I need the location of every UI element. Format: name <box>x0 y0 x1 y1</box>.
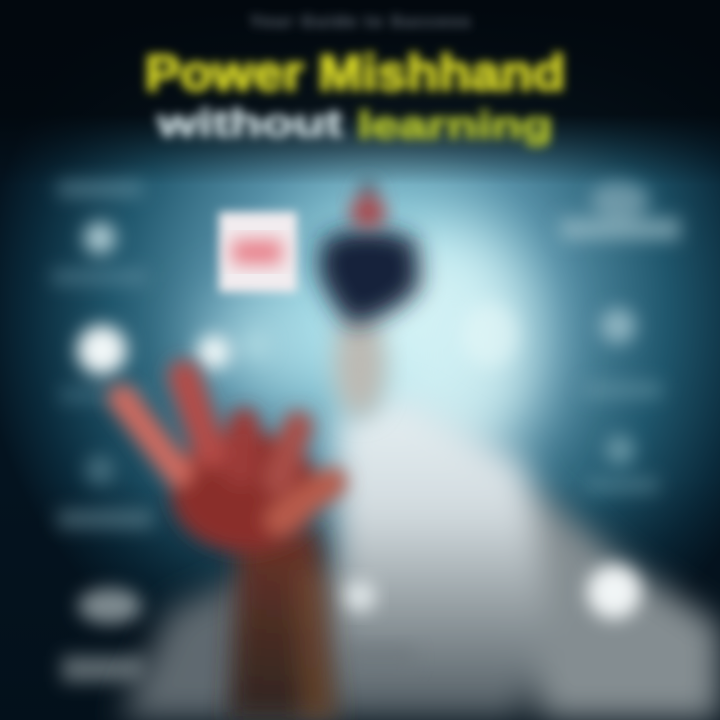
light glow around person <box>200 230 540 470</box>
small circle centre <box>344 580 376 612</box>
finger two <box>184 376 210 452</box>
right item three <box>586 435 658 492</box>
left item one <box>52 182 147 284</box>
title second line <box>156 103 553 147</box>
right item one <box>560 182 680 240</box>
neck <box>334 313 386 417</box>
white card with red mark <box>219 212 297 292</box>
title second line: without <box>156 103 343 145</box>
left column icons and labels <box>52 182 153 682</box>
finger three <box>240 424 244 470</box>
title tagline: Your Guide to Success <box>250 12 470 31</box>
finger four <box>278 426 298 480</box>
person <box>120 181 720 720</box>
hand <box>122 376 332 552</box>
right item four <box>565 650 655 672</box>
palm <box>171 432 319 552</box>
forearm <box>228 530 338 720</box>
small floating icons <box>197 303 518 369</box>
head dark <box>318 229 420 325</box>
head top red <box>350 181 386 228</box>
left item three <box>58 455 153 528</box>
right item two <box>584 308 662 398</box>
label under centre <box>345 645 415 671</box>
shirt and body <box>120 395 720 720</box>
button circle right <box>587 565 641 619</box>
title headline: Power Mishhand <box>145 45 565 101</box>
left item four <box>62 588 147 682</box>
right column icons and labels <box>560 182 680 672</box>
left item two <box>60 325 145 402</box>
finger one <box>122 398 178 472</box>
thumb <box>280 482 332 520</box>
title second line: learning <box>358 105 552 147</box>
